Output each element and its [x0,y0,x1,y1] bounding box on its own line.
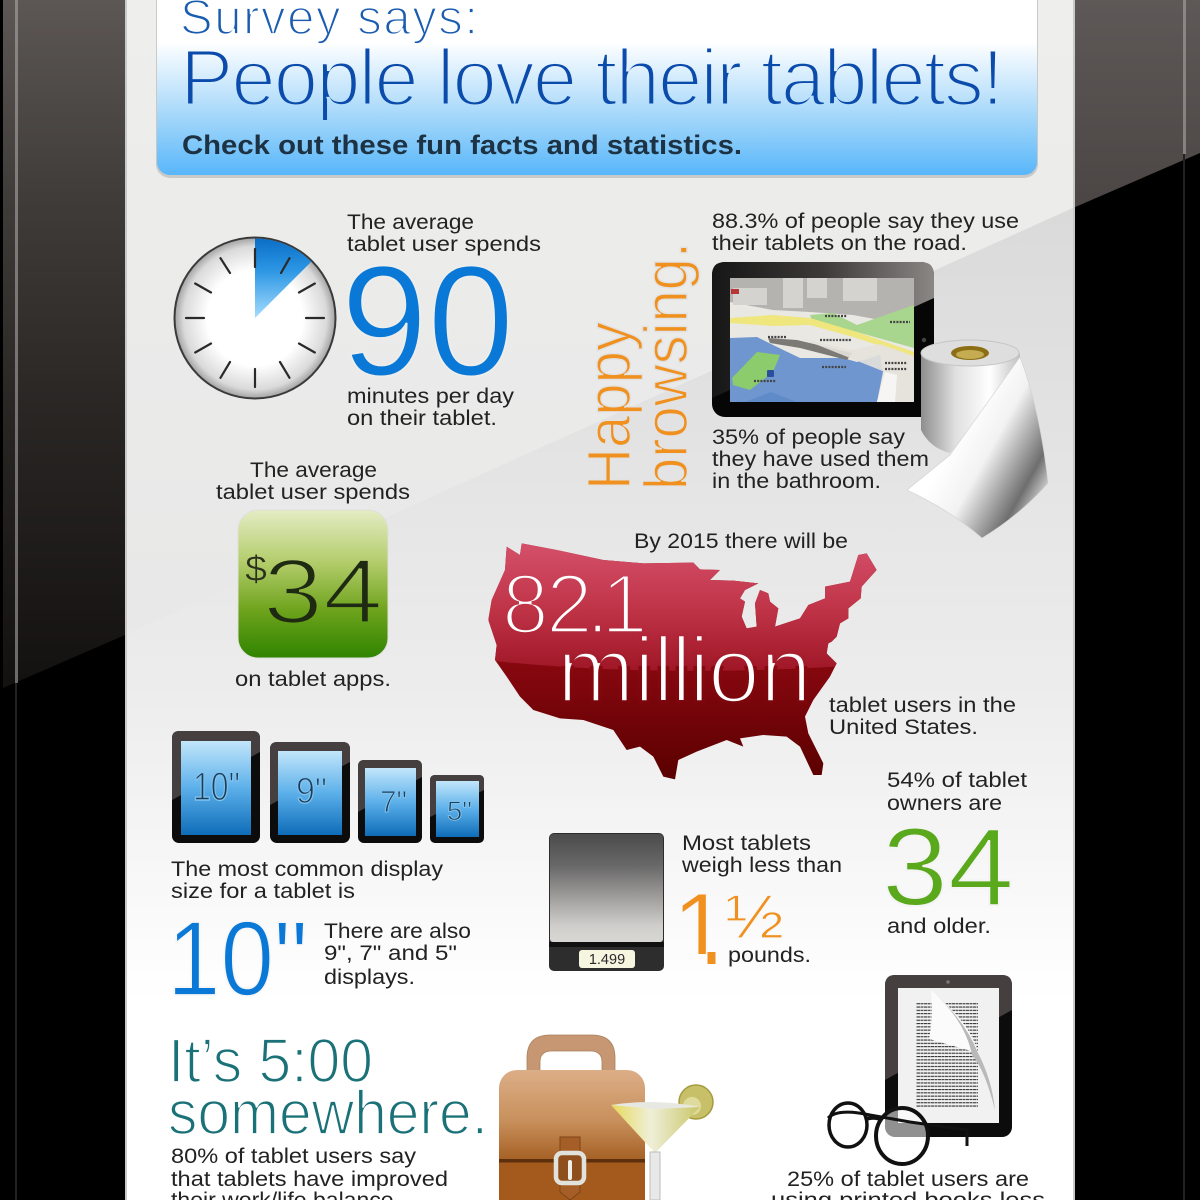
stat: display size: The most common display [171,857,443,881]
stat: weight: weigh less than [681,853,842,877]
header panel [156,0,1038,178]
icon: digital scale [549,833,664,971]
text: on the road [712,209,1019,255]
title: people love their tablets: People love their tablets! [180,33,1004,122]
stat: age: 54% of tablet [887,768,1027,792]
stat: weight: 1 [672,872,729,986]
icon: green app tile: 34 [263,541,383,643]
stat: work life balance: 80% of tablet users say [171,1144,416,1168]
stat: weight [682,834,841,966]
icon: eyeglasses [828,1103,967,1164]
stat: work life balance: somewhere. [168,1079,488,1148]
big number [502,557,812,722]
tablet with street map [712,262,934,417]
stat: 90 minutes [341,210,541,430]
screen background [125,0,1075,1200]
stat: weight: ½ [725,883,784,952]
stat: display size: There are also [324,919,471,943]
tablet 9 inch: 9" [296,770,327,811]
map: united states 82.1 million: United States. [829,715,978,739]
icon: briefcase [499,1035,645,1200]
stat: weight: Most tablets [682,831,811,855]
icons: tablet sizes [172,731,484,843]
tablet 5 inch: 5" [447,796,472,826]
stat: 90 minutes: on their tablet. [347,406,497,430]
icon: digital scale: 1.499 [589,952,625,968]
stat: $34 on apps: tablet user spends [216,480,410,504]
icon: green app tile: $ [245,548,267,589]
text: printed books: 25% of tablet users are [787,1167,1029,1191]
big number: 82.1 [502,557,648,651]
stat: display size [167,857,471,1018]
heading: happy browsing (vertical) [575,242,700,490]
page curl [929,990,978,1053]
heading: happy browsing (vertical): browsing. [632,242,700,490]
stat: $34 on apps [216,458,410,691]
us map shape [488,543,877,780]
big number: million [557,618,812,722]
text: on the road: 88.3% of people say they use [712,209,1019,233]
icon: green app tile [238,510,388,658]
stat: 90 minutes: tablet user spends [347,232,541,256]
icon: e-reader with page curl [885,975,1012,1137]
text: printed books [771,1167,1045,1200]
text: bathroom: they have used them [712,447,929,471]
stat: work life balance: that tablets have improved [171,1167,448,1191]
tablet 10 inch [172,731,260,843]
stat: age [882,768,1027,938]
heading: happy browsing (vertical): Happy [575,322,643,490]
stat: work life balance: It’s 5:00 [168,1027,373,1096]
tablet 7 inch: 7" [380,784,407,819]
text: bathroom [712,425,929,493]
tablet 5 inch [430,775,484,843]
stat: 90 minutes: 90 [341,234,514,409]
stat: age: 34 [882,806,1014,929]
tablet 9 inch [270,742,350,843]
stat: age: and older. [887,914,991,938]
stat: $34 on apps: The average [250,458,377,482]
map: united states 82.1 million: By 2015 there will be [634,529,848,553]
stat: 90 minutes: minutes per day [347,384,514,408]
icon: toilet paper roll [907,340,1048,538]
text: on the road: their tablets on the road. [712,231,967,255]
tablet 7 inch [358,760,422,843]
icon: martini glass [611,1085,713,1200]
stat: weight: pounds. [728,943,811,967]
stat: age: owners are [887,791,1002,815]
stat: display size: 9", 7" and 5" [324,941,457,965]
text: bathroom: 35% of people say [712,425,905,449]
tablet 10 inch: 10" [193,765,240,809]
text: bathroom: in the bathroom. [712,469,881,493]
stat: display size: 10" [167,900,308,1018]
stat: $34 on apps: on tablet apps. [235,667,391,691]
map: united states 82.1 million [488,532,1015,780]
subtitle: Check out these fun facts and statistics. [182,130,742,160]
stat: work life balance [168,1027,488,1200]
map screen [730,278,914,402]
stat: display size: size for a tablet is [171,879,355,903]
stat: display size: displays. [324,965,415,989]
clock icon: 90 minutes wedge [174,236,336,400]
map: united states 82.1 million: tablet users in the [829,693,1016,717]
stat: 90 minutes: The average [347,210,474,234]
